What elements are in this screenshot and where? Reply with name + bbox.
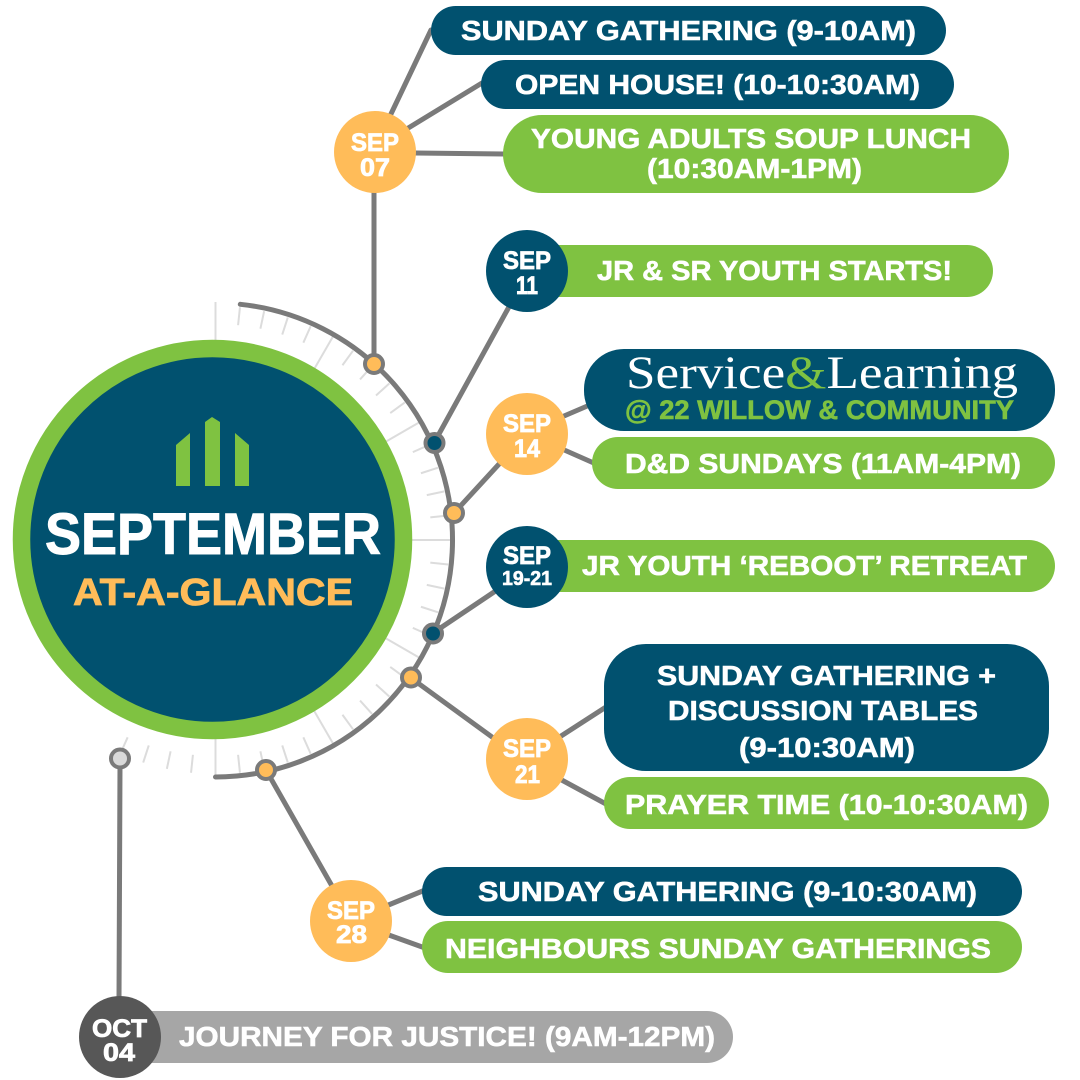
date badge: Sep 11: SEP (503, 247, 551, 275)
pill: Sunday Gathering + Discussion Tables: (9-10:30AM) (739, 732, 915, 763)
pill: Prayer Time (604, 777, 1049, 829)
date badge: Sep 14: 14 (514, 435, 540, 463)
pill: D&D Sundays (592, 437, 1055, 489)
pill: Open House: OPEN HOUSE! (10-10:30AM) (515, 69, 920, 100)
event group: Sep 21 (486, 644, 1049, 829)
pill: D&D Sundays: D&D SUNDAYS (11AM-4PM) (625, 448, 1021, 479)
pill: Sunday Gathering: SUNDAY GATHERING (9-10:30AM) (478, 876, 977, 907)
pill: Sunday Gathering + Discussion Tables (604, 644, 1049, 771)
pill: Young Adults Soup Lunch (503, 115, 1009, 193)
pill: Young Adults Soup Lunch: (10:30AM-1PM) (647, 153, 862, 184)
date badge: Sep 11: 11 (516, 272, 538, 300)
pill: Prayer Time: PRAYER TIME (10-10:30AM) (625, 789, 1028, 820)
date badge: Oct 04 (79, 996, 161, 1078)
event group: Sep 19-21 (486, 526, 1055, 608)
dial: timeline arc (216, 304, 453, 777)
date badge: Sep 21: SEP (503, 735, 551, 763)
pill: Young Adults Soup Lunch: YOUNG ADULTS SOUP LUNCH (531, 123, 971, 154)
pill: Sunday Gathering (422, 867, 1022, 916)
pill: Jr Youth Reboot Retreat: JR YOUTH ‘REBOOT’ RETREAT (582, 550, 1027, 581)
pill: Service & Learning (584, 347, 1055, 431)
date badge: Sep 07 (334, 111, 416, 193)
date badge: Sep 28: 28 (336, 921, 367, 949)
date badge: Sep 28: SEP (327, 897, 375, 925)
date badge: Oct 04: OCT (92, 1015, 147, 1043)
date badge: Sep 21: 21 (515, 761, 540, 789)
pill: Sunday Gathering: SUNDAY GATHERING (9-10AM) (461, 15, 916, 46)
pill: Jr & Sr Youth Starts (527, 245, 993, 297)
pill: Service & Learning: @ 22 WILLOW & COMMUNITY (625, 395, 1014, 425)
timeline nodes (111, 355, 463, 779)
event group: Sep 11 (486, 230, 993, 312)
date badge: Sep 28 (310, 880, 392, 962)
date badge: Sep 14: SEP (503, 410, 551, 438)
pill: Journey for Justice: JOURNEY FOR JUSTICE! (9AM-12PM) (179, 1021, 715, 1052)
date badge: Sep 21 (486, 718, 568, 800)
pill: Journey for Justice (120, 1011, 733, 1063)
date badge: Sep 19-21 (486, 526, 568, 608)
pill: Open House (481, 60, 954, 109)
date badge: Sep 19-21: 19-21 (502, 568, 552, 590)
icon: logo bars (176, 417, 249, 486)
dial: tick marks (120, 302, 452, 776)
date badge: Sep 14 (486, 393, 568, 475)
connector lines (119, 30, 606, 1000)
event group: Sep 28 (310, 867, 1022, 973)
pill: Jr & Sr Youth Starts: JR & SR YOUTH STARTS! (597, 255, 952, 286)
pill: Jr Youth Reboot Retreat (527, 540, 1055, 592)
central badge: September at-a-glance (22, 348, 404, 730)
event group: Sep 07 (334, 6, 1009, 193)
subtitle: at-a-glance: AT-A-GLANCE (73, 572, 353, 614)
date badge: Sep 11 (486, 230, 568, 312)
pill: Service & Learning: Service &Learning (626, 347, 1018, 399)
date badge: Sep 07: 07 (360, 154, 390, 182)
pill: Sunday Gathering + Discussion Tables: DISCUSSION TABLES (668, 695, 978, 726)
event group: Oct 04 (79, 996, 733, 1078)
pill: Sunday Gathering + Discussion Tables: SUNDAY GATHERING + (657, 660, 996, 691)
date badge: Oct 04: 04 (103, 1039, 135, 1067)
pill: Neighbours Sunday Gatherings: NEIGHBOURS SUNDAY GATHERINGS (445, 933, 991, 964)
date badge: Sep 07: SEP (351, 129, 399, 157)
date badge: Sep 19-21: SEP (503, 542, 551, 570)
title: September: SEPTEMBER (45, 502, 381, 567)
event group: Sep 14 (486, 347, 1055, 489)
pill: Sunday Gathering (431, 6, 946, 55)
pill: Neighbours Sunday Gatherings (422, 921, 1022, 973)
